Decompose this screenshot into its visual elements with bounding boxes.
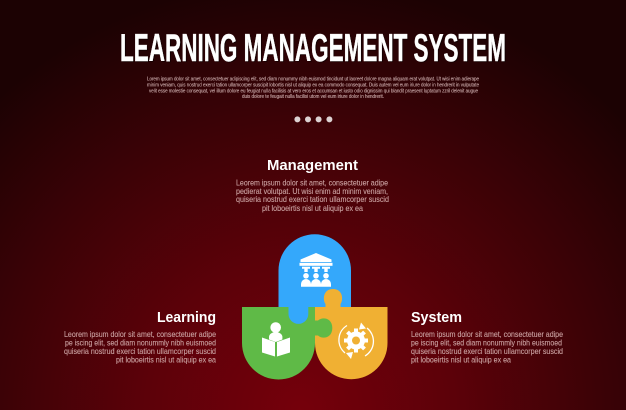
icon: building and people [300, 253, 332, 287]
heading: System: System [411, 310, 462, 326]
body: System: quiseria nostrud exerci tation ullamcorper suscid [411, 347, 563, 356]
text block: Management [236, 158, 389, 213]
body: Management: pit loboeirtis nisl ut aliquip ex ea [262, 204, 363, 213]
body: System: Leorem ipsum dolor sit amet, consectetuer adipe [411, 330, 563, 339]
body: System: pit loboeirtis nisl ut aliquip ex ea [411, 356, 511, 364]
body: Learning: pe iscing elit, sed diam nonummly nibh euismoed [65, 338, 216, 348]
intro paragraph: minim veniam, quis nostrud exerci tation ullamcorper suscipit lobortis nisl ut aliquip ex ea commodo consequat. Duis autem vel eum iriure dolor in hendrerit in vulputate [147, 82, 479, 88]
puzzle diagram [242, 234, 388, 379]
icon: gear with cycle arrows [339, 322, 373, 359]
body: Learning: pit loboeirtis nisl ut aliquip ex ea [116, 356, 216, 364]
body: Management [236, 178, 389, 213]
icon: reader with book [262, 322, 290, 356]
heading: Management: Management [267, 158, 358, 174]
puzzle piece: orange [315, 289, 388, 379]
body: System: pe iscing elit, sed diam nonummly nibh euismoed [411, 338, 562, 348]
body: Learning: quiseria nostrud exerci tation ullamcorper suscid [64, 347, 216, 356]
blue puzzle tab [288, 305, 308, 324]
intro paragraph: duis dolore te feugait nulla facilisi utom vel eum iriure dolor in hendrerit. [242, 94, 384, 100]
body: System [411, 330, 563, 364]
intro paragraph: Lorem ipsum dolor sit amet, consectetuer adipiscing elit, sed diam nonummy nibh euismod tincidunt ut laoreet dolore magna aliquam erat volutpat. Ut wisi enim adierape [147, 76, 479, 82]
pagination dots [294, 116, 332, 122]
heading: Learning: Learning [157, 310, 216, 326]
intro paragraph: velit esse molestie consequat, vel illum dolore eu feugiat nulla facilisis at vero eros et accumsan et iusto odio dignissim qui blandit praesent luptatum zzril delenit augue [149, 88, 478, 94]
puzzle piece: green [242, 307, 332, 379]
body: Management: Leorem ipsum dolor sit amet, consectetuer adipe [236, 178, 388, 188]
body: Management: pedierat volutpat. Ut wisi enim ad minim veniam, [236, 187, 388, 196]
body: Management: quiseria nostrud exerci tation ullamcorper suscid [236, 195, 389, 204]
intro paragraph [147, 76, 479, 100]
puzzle piece: blue [278, 234, 351, 310]
text block: System [411, 310, 563, 364]
text block: Learning [64, 310, 216, 364]
body: Learning [64, 330, 216, 364]
body: Learning: Leorem ipsum dolor sit amet, consectetuer adipe [64, 330, 216, 339]
